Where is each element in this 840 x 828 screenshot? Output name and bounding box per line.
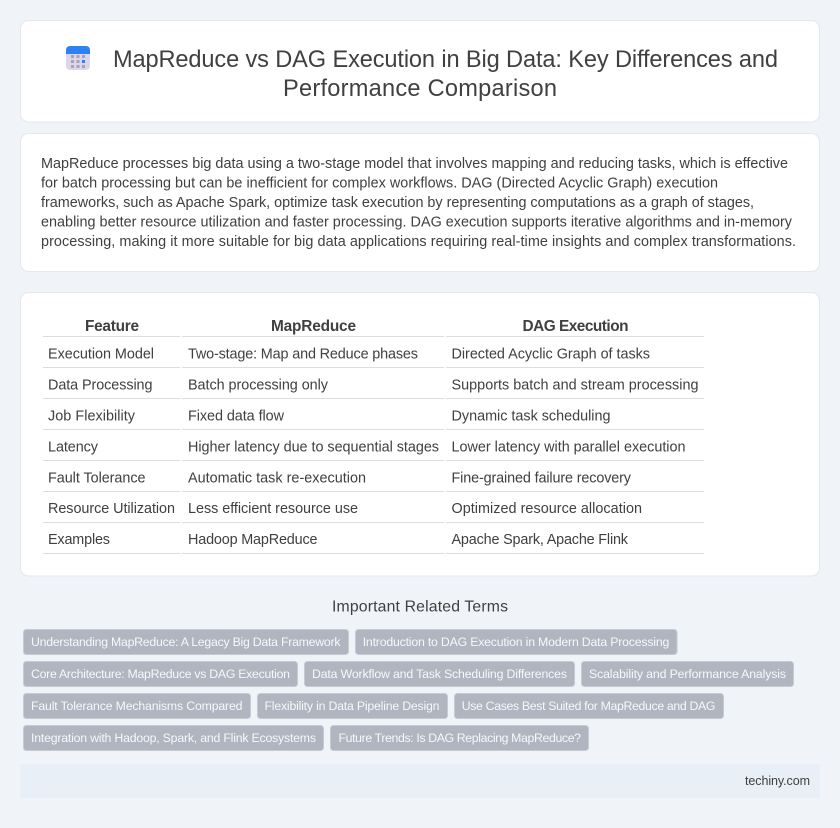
tag: Scalability and Performance Analysis [589, 667, 786, 681]
table row: Data Processing: Data Processing [48, 378, 152, 394]
table row: Data Processing: Batch processing only [188, 378, 329, 394]
icon: calendar [66, 46, 90, 70]
tag: Data Workflow and Task Scheduling Differences [312, 667, 567, 681]
table row: Execution Model [43, 346, 704, 368]
panel: title header [20, 20, 820, 122]
title: MapReduce vs DAG Execution in Big Data: Key Differences and [113, 47, 778, 73]
title [113, 47, 778, 102]
title: Performance Comparison [283, 76, 557, 102]
table row: Job Flexibility: Fixed data flow [188, 408, 285, 424]
text block: summary: enabling better resource utilization and faster processing. DAG execution supports iterative algorithms and in-memory [41, 214, 793, 230]
table row: Job Flexibility [43, 408, 704, 430]
table header: MapReduce [271, 318, 356, 335]
tag [24, 630, 348, 654]
table row: Resource Utilization: Less efficient resource use [188, 501, 358, 517]
tag: Flexibility in Data Pipeline Design [264, 699, 440, 713]
table header: Feature [85, 318, 139, 335]
tag: Fault Tolerance Mechanisms Compared [31, 699, 243, 713]
tag [24, 662, 298, 686]
table row: Fault Tolerance [43, 470, 704, 492]
tag [258, 694, 448, 718]
table row: Latency: Lower latency with parallel execution [452, 440, 686, 456]
text block: summary: MapReduce processes big data using a two-stage model that involves mapping and reducing tasks, which is effective [41, 156, 788, 172]
table row: Fault Tolerance: Fine-grained failure recovery [452, 470, 632, 486]
related terms tags [24, 630, 794, 750]
table row: Execution Model: Execution Model [48, 346, 154, 362]
tag: Future Trends: Is DAG Replacing MapReduce? [338, 731, 581, 745]
footer [20, 764, 820, 798]
tag [24, 726, 324, 750]
table row: Job Flexibility: Dynamic task scheduling [452, 408, 610, 424]
table row: Latency: Higher latency due to sequential stages [188, 440, 439, 456]
text block: summary: frameworks, such as Apache Spark, optimize task execution by representing computations as a graph of stages, [41, 195, 754, 211]
footer: techiny.com [745, 774, 810, 788]
table row: Execution Model: Two-stage: Map and Reduce phases [188, 346, 418, 362]
tag [24, 694, 250, 718]
tag: Understanding MapReduce: A Legacy Big Data Framework [31, 635, 341, 649]
tag [454, 694, 724, 718]
table row: Latency: Latency [48, 440, 99, 456]
table row: Fault Tolerance: Automatic task re-execution [188, 470, 366, 486]
tag: Use Cases Best Suited for MapReduce and DAG [462, 699, 716, 713]
tag: Core Architecture: MapReduce vs DAG Execution [31, 667, 290, 681]
text block: summary [41, 156, 796, 250]
table row: Resource Utilization: Resource Utilization [48, 501, 175, 517]
table row: Latency [43, 440, 704, 461]
table row: Examples: Hadoop MapReduce [188, 532, 318, 548]
table header [43, 318, 704, 337]
table row: Data Processing [43, 378, 704, 399]
table row: Examples: Apache Spark, Apache Flink [452, 532, 629, 548]
table header: DAG Execution [522, 318, 628, 335]
tag: Introduction to DAG Execution in Modern Data Processing [363, 635, 669, 649]
table row: Resource Utilization: Optimized resource allocation [452, 501, 642, 517]
tag [582, 662, 794, 686]
heading: related terms: Important Related Terms [332, 598, 508, 616]
tag: Integration with Hadoop, Spark, and Flink Ecosystems [31, 731, 316, 745]
table row: Job Flexibility: Job Flexibility [48, 408, 136, 424]
table row: Data Processing: Supports batch and stream processing [452, 378, 698, 394]
text block: summary: processing, making it more suitable for big data applications requiring real-time insights and complex transformations. [41, 234, 796, 250]
text block: summary: for batch processing but can be inefficient for complex workflows. DAG (Directed Acyclic Graph) execution [41, 176, 718, 192]
table row: Execution Model: Directed Acyclic Graph of tasks [452, 346, 650, 362]
panel: comparison table [20, 292, 820, 576]
tag [304, 662, 574, 686]
panel: summary paragraph [20, 134, 820, 272]
table row: Resource Utilization [43, 501, 704, 523]
tag [330, 726, 588, 750]
table row: Examples: Examples [48, 532, 110, 548]
tag [356, 630, 677, 654]
table row: Fault Tolerance: Fault Tolerance [48, 470, 146, 486]
table row: Examples [43, 532, 704, 554]
